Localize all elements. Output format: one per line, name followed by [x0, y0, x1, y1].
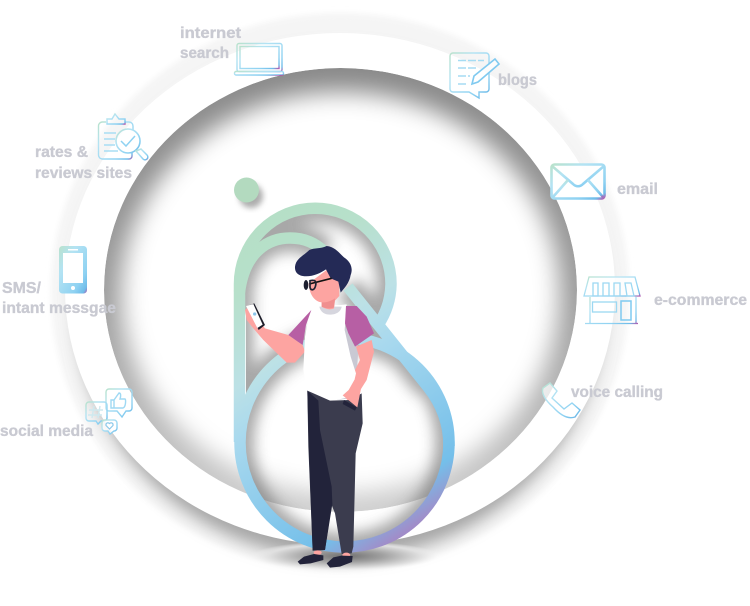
label: rates and reviews sites: reviews sites: [35, 165, 132, 182]
label: internet search: [180, 25, 241, 62]
label: social media: social media: [0, 423, 93, 440]
shirt: [303, 304, 356, 402]
label: internet search: search: [180, 45, 229, 62]
dot of logo: [234, 178, 263, 208]
shirt shade: [337, 327, 358, 400]
label: email: email: [617, 181, 658, 198]
label: SMS instant message: intant messgae: [2, 300, 116, 317]
outer ring with soft shadow: [51, 13, 629, 571]
person upper body: [245, 246, 374, 402]
pocket and hand: [343, 380, 363, 411]
logo letter R: [240, 208, 449, 547]
logo inner shadows: [240, 208, 449, 547]
label: voice calling: voice calling: [571, 384, 663, 401]
icon: smartphone: [59, 246, 87, 294]
dark trouser leg: [307, 391, 332, 551]
label: internet search: internet: [180, 25, 241, 42]
hair: [295, 246, 352, 293]
icon: clipboard and magnifier: [98, 114, 148, 160]
light trouser: [307, 391, 363, 554]
label: SMS instant message: SMS/: [2, 280, 42, 297]
label: rates and reviews sites: [35, 144, 132, 182]
icon: envelope: [552, 164, 604, 198]
phone: [246, 303, 265, 330]
neck and face: [309, 270, 339, 309]
inner recessed disc: [104, 68, 577, 512]
ankles: [314, 550, 350, 557]
icon: storefront: [584, 277, 640, 324]
label: rates and reviews sites: rates &: [35, 144, 88, 161]
collar: [319, 307, 342, 315]
icon: telephone handset: [542, 383, 580, 418]
label: SMS instant message: [2, 280, 116, 317]
right arm: [343, 340, 374, 401]
label: blogs: blogs: [498, 72, 537, 89]
left arm: [245, 307, 305, 363]
label: e-commerce: e-commerce: [654, 292, 747, 309]
icon: social media bubbles: [86, 389, 132, 434]
sleeves: [288, 306, 374, 347]
person legs: [298, 380, 363, 568]
icon: laptop: [234, 44, 284, 75]
icon: blog note and pencil: [450, 53, 499, 98]
shoes: [298, 554, 353, 568]
floor shadow: [251, 541, 439, 571]
glasses: [304, 278, 332, 290]
